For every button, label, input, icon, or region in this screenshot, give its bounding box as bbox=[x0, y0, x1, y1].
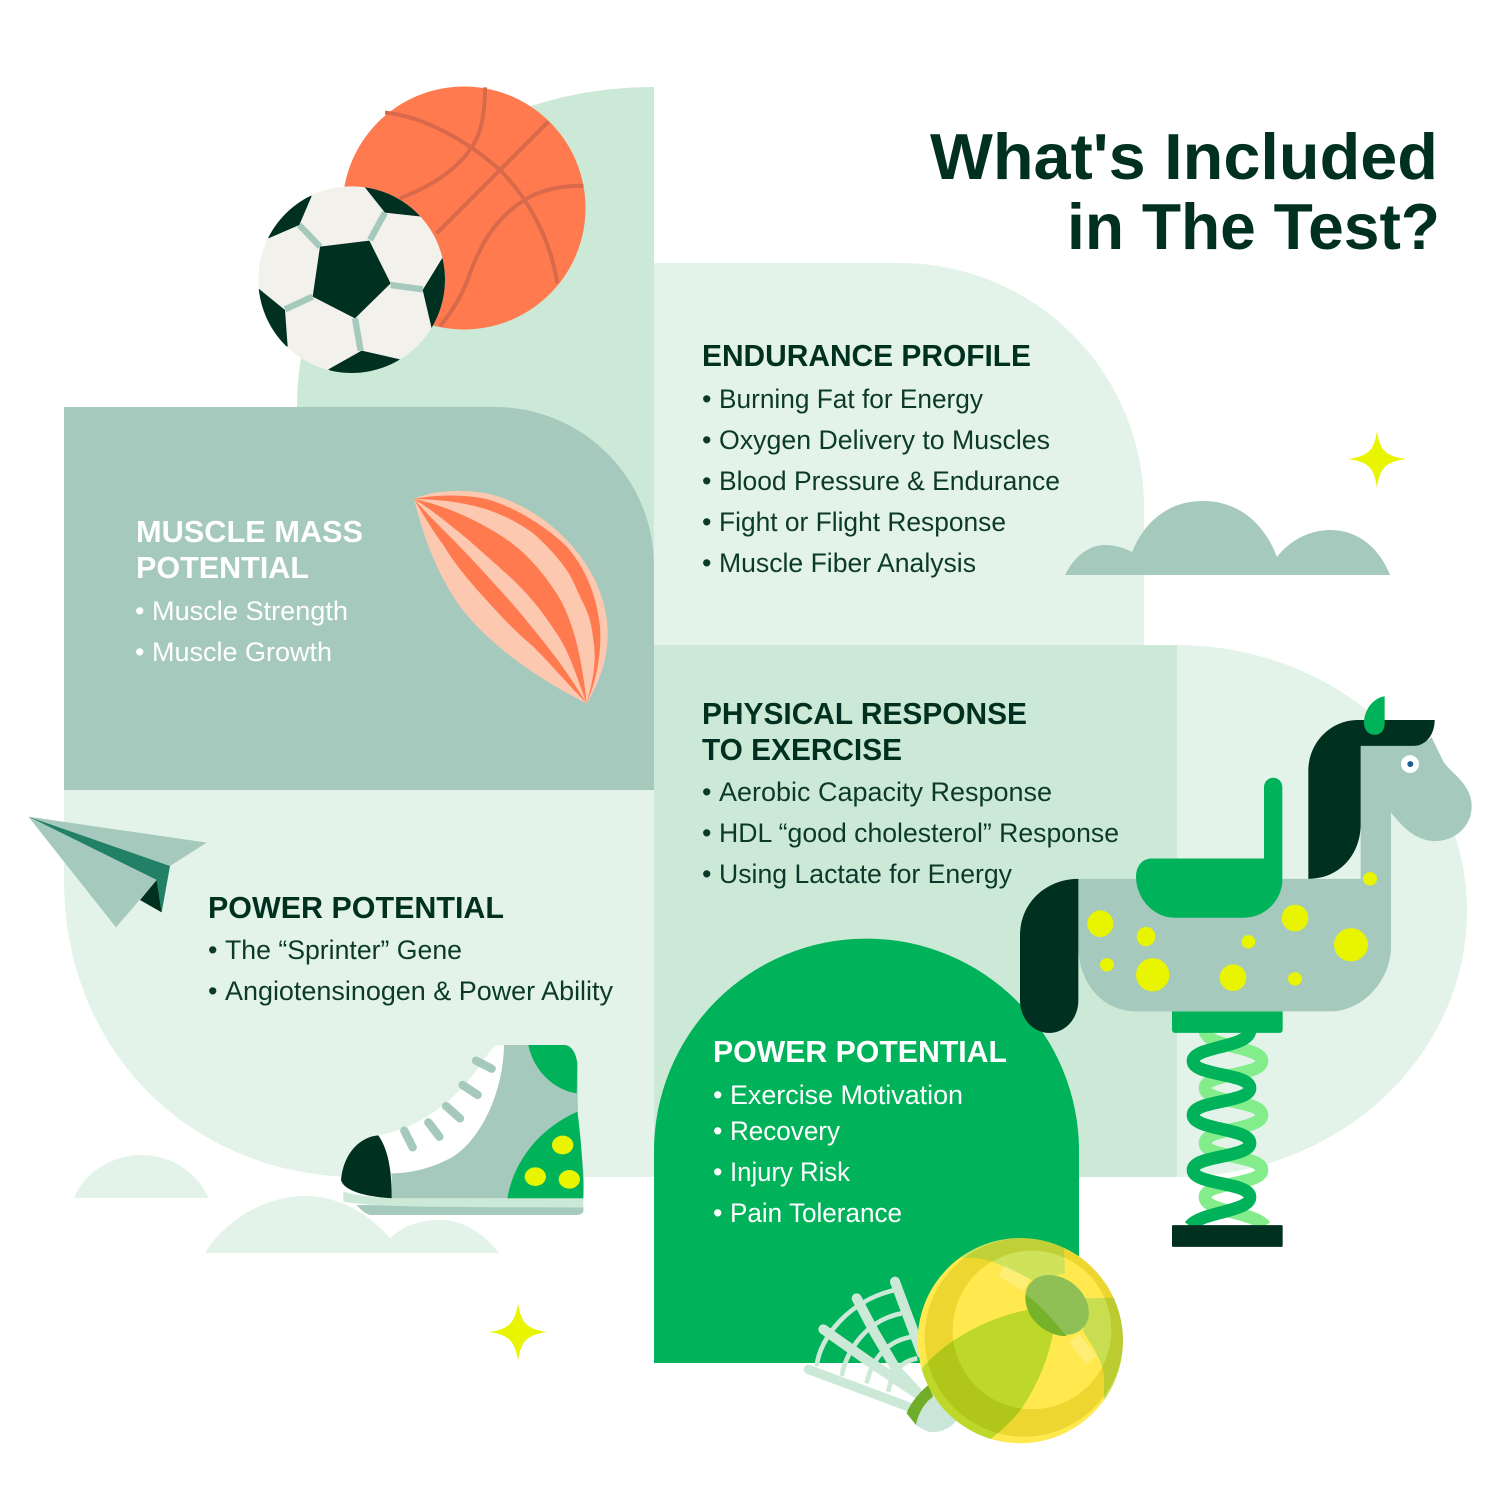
icon: soccer ball bbox=[258, 186, 445, 373]
text block: power potential green: • bbox=[713, 1116, 722, 1146]
text block: power potential green: POWER POTENTIAL bbox=[713, 1034, 1007, 1069]
text block: muscle mass potential: • bbox=[135, 596, 144, 626]
text block: physical response to exercise bbox=[702, 696, 1119, 889]
text block: muscle mass potential: • bbox=[135, 637, 144, 667]
icon: cloud small left bbox=[74, 1155, 209, 1198]
text block: power potential left: Angiotensinogen & Power Ability bbox=[225, 976, 613, 1006]
icon: muscle bbox=[414, 491, 608, 703]
text block: power potential green: • bbox=[713, 1198, 722, 1228]
panel: green arch bbox=[654, 939, 1079, 1363]
text block: physical response to exercise: • bbox=[702, 818, 711, 848]
title: in The Test? bbox=[1067, 190, 1440, 263]
text block: physical response to exercise: TO EXERCISE bbox=[702, 732, 902, 767]
text block: power potential left: • bbox=[208, 976, 217, 1006]
text block: endurance profile: • bbox=[702, 507, 711, 537]
icon: beach ball bbox=[918, 1238, 1123, 1444]
text block: physical response to exercise: • bbox=[702, 777, 711, 807]
text block: power potential left: • bbox=[208, 935, 217, 965]
text block: endurance profile: Muscle Fiber Analysis bbox=[719, 548, 976, 578]
text block: endurance profile: • bbox=[702, 548, 711, 578]
icon: sparkle right bbox=[1348, 431, 1406, 488]
text block: power potential left: POWER POTENTIAL bbox=[208, 890, 504, 925]
panel: muscle mass background bbox=[64, 407, 654, 790]
panel: top background shape bbox=[297, 87, 654, 560]
text block: physical response to exercise: PHYSICAL RESPONSE bbox=[702, 696, 1027, 731]
text block: physical response to exercise: Using Lactate for Energy bbox=[719, 859, 1012, 889]
icon: sparkle bottom bbox=[489, 1303, 547, 1361]
icon: paper plane bbox=[28, 817, 207, 927]
text block: physical response to exercise: • bbox=[702, 859, 711, 889]
text block: physical response to exercise: Aerobic Capacity Response bbox=[719, 777, 1052, 807]
text block: endurance profile: Burning Fat for Energy bbox=[719, 384, 983, 414]
text block: muscle mass potential: MUSCLE MASS bbox=[136, 514, 363, 549]
text block: endurance profile: • bbox=[702, 384, 711, 414]
title bbox=[930, 120, 1440, 263]
icon: basketball bbox=[342, 86, 586, 330]
text block: power potential green: Exercise Motivation bbox=[730, 1080, 963, 1110]
text block: muscle mass potential: Muscle Strength bbox=[152, 596, 348, 626]
text block: endurance profile: • bbox=[702, 425, 711, 455]
icon: cloud right bbox=[1065, 501, 1390, 575]
panel: physical response right lobe bbox=[1177, 645, 1467, 1177]
text block: power potential green: Recovery bbox=[730, 1116, 840, 1146]
icon: sneaker bbox=[341, 1045, 584, 1215]
text block: power potential left bbox=[208, 890, 613, 1006]
text block: power potential green: Injury Risk bbox=[730, 1157, 850, 1187]
text block: endurance profile: Oxygen Delivery to Muscles bbox=[719, 425, 1050, 455]
panel: physical response background bbox=[654, 645, 1177, 1177]
panel: endurance background bbox=[654, 263, 1144, 645]
text block: power potential green: • bbox=[713, 1080, 722, 1110]
text block: physical response to exercise: HDL “good cholesterol” Response bbox=[719, 818, 1119, 848]
text block: endurance profile: Blood Pressure & Endurance bbox=[719, 466, 1060, 496]
text block: muscle mass potential: POTENTIAL bbox=[136, 550, 309, 585]
title: What's Included bbox=[930, 120, 1438, 193]
text block: power potential green bbox=[713, 1034, 1007, 1228]
text block: endurance profile bbox=[702, 338, 1060, 578]
icon: spring rider horse bbox=[1020, 696, 1472, 1247]
icon: cloud bottom left bbox=[205, 1196, 499, 1253]
text block: power potential left: The “Sprinter” Gene bbox=[225, 935, 462, 965]
text block: power potential green: • bbox=[713, 1157, 722, 1187]
text block: endurance profile: ENDURANCE PROFILE bbox=[702, 338, 1031, 373]
text block: muscle mass potential bbox=[135, 514, 363, 667]
panel: power potential background bbox=[64, 790, 654, 1177]
text block: muscle mass potential: Muscle Growth bbox=[152, 637, 332, 667]
text block: endurance profile: • bbox=[702, 466, 711, 496]
icon: shuttlecock bbox=[808, 1282, 957, 1432]
text block: endurance profile: Fight or Flight Response bbox=[719, 507, 1006, 537]
text block: power potential green: Pain Tolerance bbox=[730, 1198, 902, 1228]
